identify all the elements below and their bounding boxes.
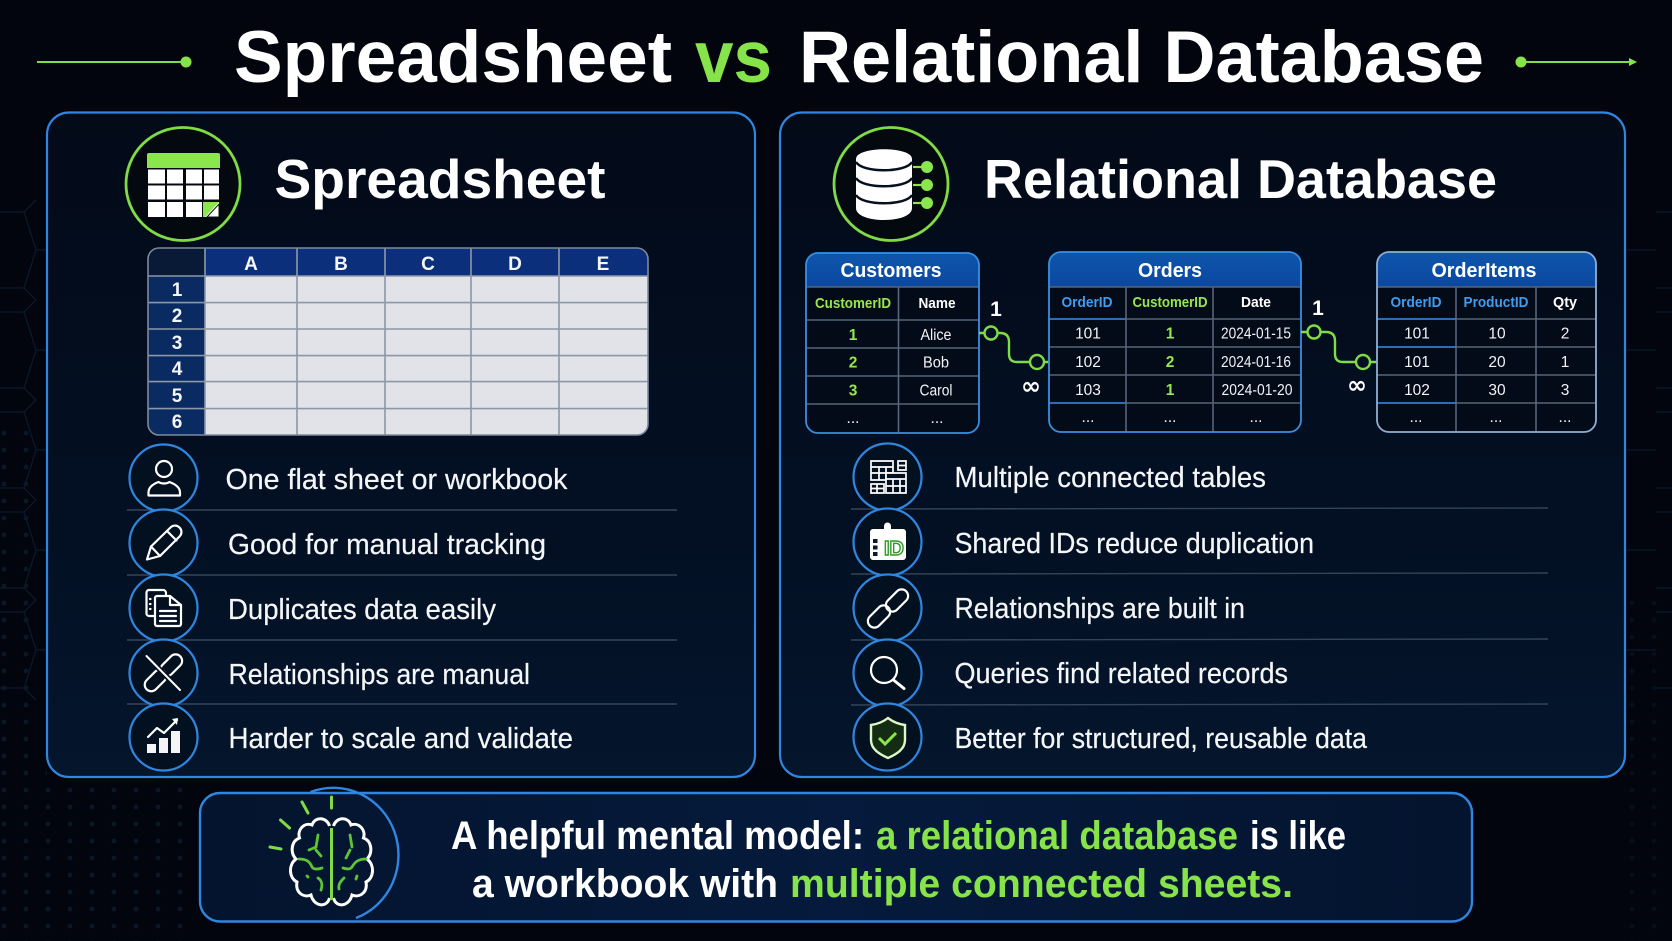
text: mental model line 1: a relational database — [876, 814, 1238, 858]
table: orderitems: 2 — [1561, 326, 1569, 342]
table: customers: ... — [931, 410, 943, 427]
text: search: Queries find related records — [954, 658, 1288, 690]
table: orders: ... — [1082, 409, 1094, 426]
text: multiple tables: Multiple connected tables — [954, 462, 1266, 494]
spreadsheet grid: 2 — [172, 306, 182, 327]
table: orderitems: 20 — [1488, 354, 1506, 371]
text: mental model line 1: A helpful mental model: — [451, 814, 864, 858]
icon: database — [834, 128, 948, 240]
table: customers — [806, 253, 979, 433]
item: duplicates: Duplicates data easily — [228, 594, 497, 626]
table: orders: 1 — [1166, 382, 1175, 399]
item: multiple tables — [854, 444, 922, 510]
list: spreadsheet traits — [127, 444, 677, 770]
text: mental model line 2: a workbook with — [472, 862, 778, 906]
table: orders: 1 — [1166, 326, 1175, 342]
item: one flat sheet: One flat sheet or workbook — [226, 464, 568, 496]
table: orders — [1049, 252, 1301, 432]
table: orders: 103 — [1075, 382, 1101, 399]
table: orders: 2024-01-15 — [1221, 326, 1291, 342]
table: orderitems: 102 — [1404, 382, 1430, 399]
item: one flat sheet — [130, 444, 568, 512]
item: manual tracking — [130, 510, 546, 576]
item: scale — [130, 704, 573, 770]
table: orderitems: ... — [1559, 409, 1571, 426]
title: vs — [695, 17, 772, 98]
table: customers: 1 — [849, 327, 858, 344]
item: duplicates — [130, 574, 497, 642]
table: orderitems: ... — [1410, 409, 1422, 426]
table: orders: Orders — [1138, 260, 1202, 282]
item: links — [854, 574, 922, 642]
table: orderitems: ... — [1490, 409, 1502, 426]
item: search — [854, 640, 922, 706]
text: shared ids: Shared IDs reduce duplication — [954, 528, 1314, 560]
callout: mental model — [200, 788, 1472, 922]
spreadsheet grid: A — [244, 254, 258, 275]
table: orderitems: Qty — [1553, 294, 1578, 311]
table: customers: Alice — [920, 327, 952, 344]
table: orderitems: 10 — [1488, 326, 1506, 342]
item: shared ids: ID — [884, 538, 904, 560]
connector: customers to orders — [979, 298, 1049, 400]
table: orders: 2 — [1166, 354, 1174, 371]
spreadsheet grid: 3 — [172, 333, 182, 354]
table: orders: Date — [1241, 294, 1271, 311]
title — [234, 17, 1484, 98]
table: customers: Customers — [840, 260, 942, 282]
title: Spreadsheet — [234, 17, 672, 98]
heading: spreadsheet: Spreadsheet — [274, 148, 606, 210]
connector: orders to orderitems — [1301, 297, 1377, 399]
connector: orders to orderitems: ∞ — [1347, 371, 1367, 399]
table: orderitems: 101 — [1404, 326, 1430, 342]
table: orders: 2024-01-20 — [1222, 382, 1293, 399]
item: shield — [854, 704, 922, 770]
connector: orders to orderitems: 1 — [1312, 297, 1324, 320]
table: orderitems: 3 — [1561, 382, 1569, 399]
table: orders: ... — [1250, 409, 1262, 426]
table: customers: 3 — [849, 382, 858, 400]
item: scale: Harder to scale and validate — [228, 723, 573, 755]
text: mental model line 2 — [472, 862, 1293, 906]
table: customers: CustomerID — [815, 295, 891, 312]
icon: spreadsheet — [126, 128, 240, 240]
table: customers: Bob — [923, 354, 949, 372]
item: manual relationships — [130, 640, 530, 706]
text: links: Relationships are built in — [954, 593, 1245, 625]
table: orders: 101 — [1075, 326, 1101, 342]
text: mental model line 2: multiple connected sheets. — [790, 862, 1293, 906]
text: mental model line 1 — [451, 814, 1346, 858]
table: orderitems — [1377, 252, 1596, 432]
table: orderitems: OrderItems — [1432, 260, 1536, 282]
connector: customers to orders: ∞ — [1021, 372, 1041, 400]
connector: customers to orders: 1 — [990, 298, 1002, 321]
table: customers: Carol — [920, 382, 952, 400]
icon: brain — [270, 788, 398, 918]
item: manual tracking: Good for manual tracking — [228, 529, 546, 561]
table: orderitems: 1 — [1561, 354, 1569, 371]
panel: relational database — [780, 112, 1625, 777]
list: database traits — [851, 444, 1548, 770]
panel: spreadsheet — [47, 112, 755, 777]
spreadsheet grid: 1 — [172, 280, 183, 301]
item: shared ids — [854, 508, 922, 576]
table: customers: ... — [847, 410, 859, 427]
table: orders: OrderID — [1062, 294, 1113, 311]
spreadsheet grid: D — [508, 254, 522, 275]
table: orderitems: 101 — [1404, 354, 1430, 371]
text: mental model line 1: is like — [1250, 814, 1346, 858]
text: shield: Better for structured, reusable data — [954, 723, 1367, 755]
title: Relational Database — [799, 17, 1484, 98]
table: orderitems: ProductID — [1464, 294, 1529, 311]
table: orderitems: OrderID — [1390, 294, 1442, 311]
right title arrow decoration — [1516, 56, 1637, 68]
table: orders: CustomerID — [1132, 294, 1208, 311]
table: orders: ... — [1164, 409, 1176, 426]
table: orderitems: 30 — [1488, 382, 1506, 399]
spreadsheet grid: C — [421, 254, 435, 275]
spreadsheet grid — [148, 248, 648, 435]
spreadsheet grid: 5 — [172, 386, 183, 407]
spreadsheet grid: B — [334, 254, 348, 275]
heading: relational database: Relational Database — [984, 148, 1497, 210]
spreadsheet grid: E — [597, 254, 609, 275]
spreadsheet grid: 4 — [172, 359, 183, 380]
table: orders: 102 — [1075, 354, 1101, 371]
left title line decoration — [37, 56, 192, 68]
spreadsheet grid: 6 — [172, 412, 182, 433]
item: manual relationships: Relationships are manual — [228, 659, 530, 691]
table: orders: 2024-01-16 — [1221, 354, 1291, 371]
table: customers: 2 — [849, 354, 857, 372]
table: customers: Name — [918, 295, 956, 312]
